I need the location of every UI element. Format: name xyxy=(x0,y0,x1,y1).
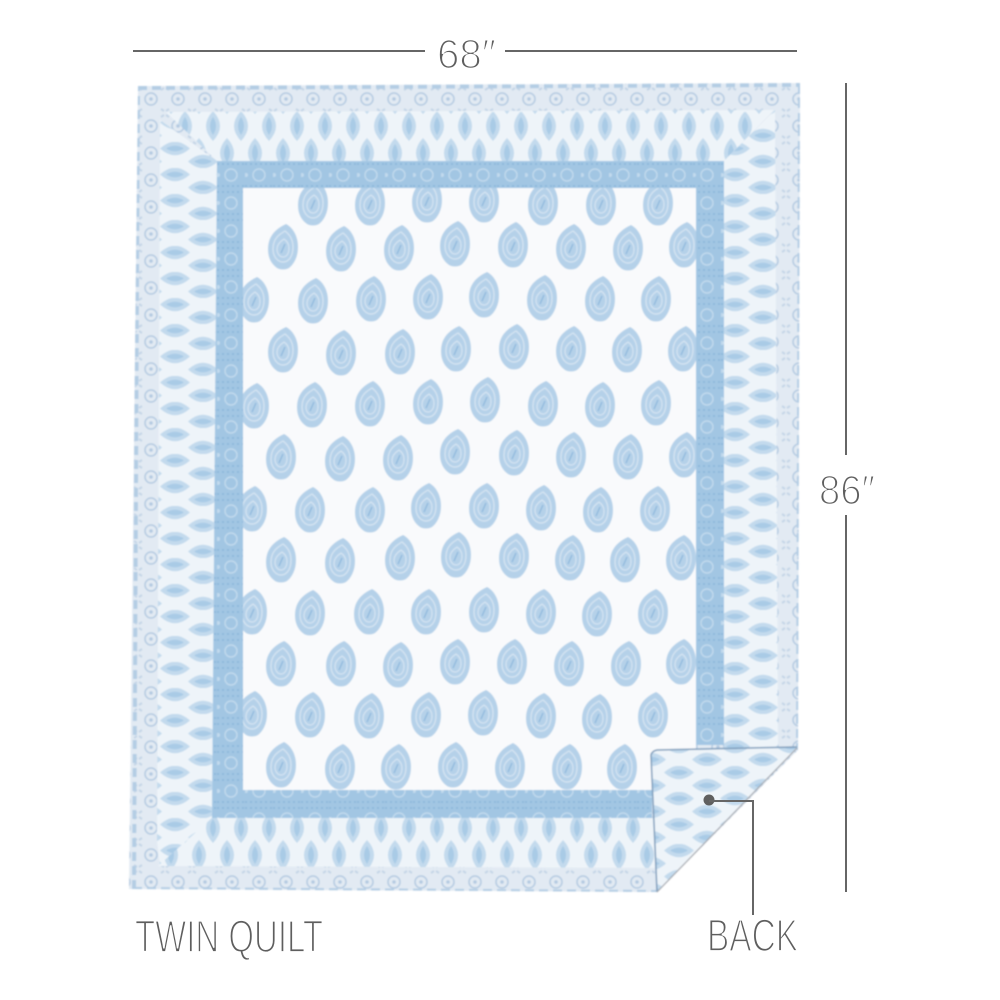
height dimension: 86 inches: 86″ xyxy=(819,467,875,513)
quilt outer printed border xyxy=(120,80,810,900)
twin quilt dimension infographic xyxy=(128,40,874,960)
folded corner showing quilt back xyxy=(651,747,797,892)
width dimension: 68 inches: 68″ xyxy=(437,31,496,77)
quilt top wave border xyxy=(166,110,774,161)
leader line from quilt back to label xyxy=(704,794,753,915)
label: back: BACK xyxy=(707,910,798,961)
paisley motifs xyxy=(237,177,699,790)
quilt right wave border xyxy=(724,110,778,750)
quilt bottom wave border xyxy=(158,818,657,868)
quilt xyxy=(120,80,810,900)
quilt left wave border xyxy=(157,120,217,866)
quilt white centre xyxy=(243,188,696,790)
quilt inner blue band xyxy=(212,161,724,818)
label: twin quilt: TWIN QUILT xyxy=(135,911,323,962)
